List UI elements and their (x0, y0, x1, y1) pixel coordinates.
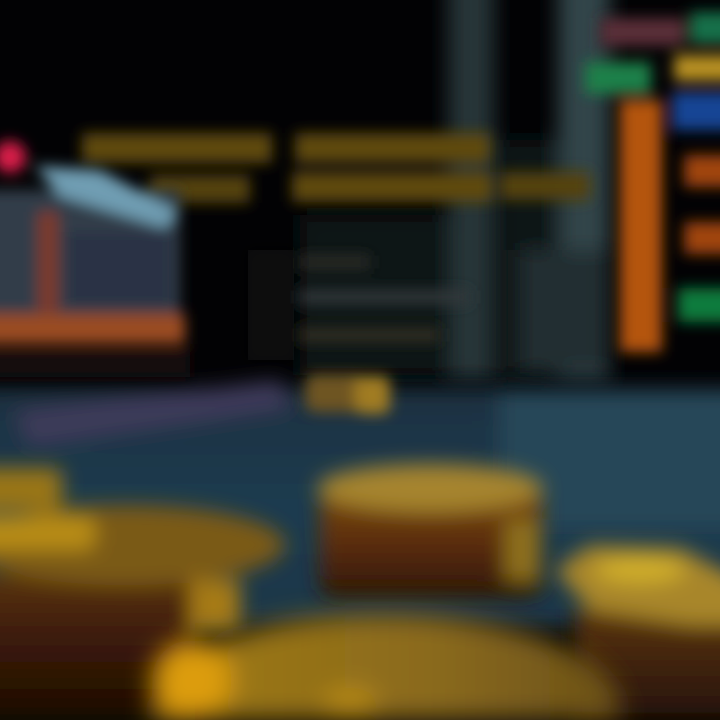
red light (0, 141, 26, 173)
right coin (555, 545, 720, 720)
sign: green top (585, 62, 651, 94)
small coin top (0, 468, 62, 510)
bright glint (152, 640, 232, 720)
coin face (152, 614, 620, 720)
sign: vertical orange (620, 100, 662, 352)
coin edge highlight (505, 520, 539, 580)
tram (0, 141, 190, 377)
street (0, 380, 720, 628)
left coin stack (0, 468, 285, 720)
coin top (555, 545, 720, 625)
coin side (575, 610, 720, 720)
sign: orange lower (684, 222, 720, 254)
lower glint (324, 688, 376, 720)
body lines (illegible) (248, 250, 470, 360)
coin rim bright (0, 516, 95, 550)
background buildings (300, 0, 610, 380)
tram dark window (68, 232, 170, 304)
tram orange base (0, 314, 185, 344)
foreground coin (152, 614, 620, 720)
sign: yellow (674, 55, 720, 81)
sign: green lower (678, 288, 720, 322)
coin top (317, 464, 543, 512)
large coin top (0, 505, 285, 585)
small distant coin (305, 374, 390, 414)
headline (illegible blurred gold lettering) (82, 133, 590, 203)
large coin side (0, 575, 195, 720)
neon signs (585, 12, 720, 352)
tram body (0, 190, 180, 320)
center coin (317, 464, 543, 598)
tram roof (35, 166, 178, 228)
sign: top green corner (690, 12, 720, 44)
sign: orange upper (684, 155, 720, 187)
coin edge (190, 580, 240, 630)
tram red post (38, 212, 58, 312)
coin highlight (595, 557, 685, 583)
coin body (305, 374, 365, 412)
tram shadow (0, 352, 190, 377)
street highlight (500, 392, 720, 527)
coin bright end (355, 376, 390, 414)
road purple band (15, 380, 290, 445)
sign: top red (600, 18, 685, 46)
sign: blue (672, 92, 720, 130)
coin side (320, 490, 542, 598)
